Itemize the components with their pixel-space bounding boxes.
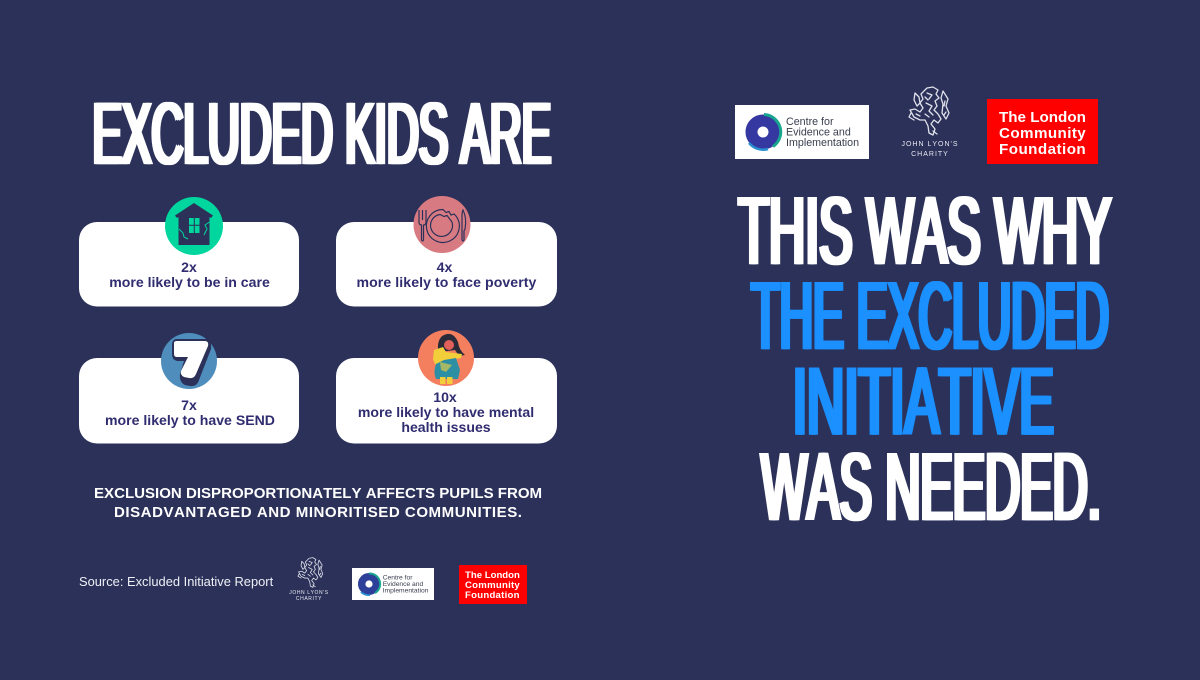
logo: Centre for Evidence small: Centre for [383,574,413,581]
headline: THIS WAS WHY [738,178,1111,285]
headline [738,178,1111,541]
icon: plate and cutlery [414,196,470,253]
stat text: 10x: 10x [433,389,457,405]
stat text: 10x [358,389,534,435]
headline: INITIATIVE [793,349,1054,455]
logo: London Community Foundation large: The London [999,109,1086,126]
logo: John Lyon's Charity small: CHARITY [296,596,322,602]
logo: London Community Foundation small: Foundation [465,590,520,601]
stat text: 2x [109,259,270,290]
logo: Centre for Evidence large: Centre for [786,116,834,128]
statement text [94,485,542,521]
logo: John Lyon's Charity small [289,558,329,602]
stat text: 10x: health issues [401,419,491,435]
stat text: 4x: more likely to face poverty [357,274,537,290]
panel: mental health [336,330,557,444]
stat text: 2x: 2x [181,259,197,275]
stat text: 4x: 4x [437,259,452,275]
icon: number seven [161,333,217,389]
logo: John Lyon's Charity small: JOHN LYON'S [289,590,329,596]
stat text: 2x: more likely to be in care [109,274,270,290]
logo: Centre for Evidence large: Implementation [786,137,859,149]
panel: in care [79,197,299,306]
panel: poverty [336,196,557,306]
logo: Centre for Evidence small: Evidence and [383,581,424,588]
logo: John Lyon's Charity large: CHARITY [911,151,949,158]
logo: Centre for Evidence large [735,105,869,159]
title: EXCLUDED KIDS ARE [93,85,551,182]
logo: John Lyon's Charity large [901,87,959,158]
headline: THE EXCLUDED [751,262,1109,369]
stat text: 7x [105,397,275,428]
logo: London Community Foundation large [987,99,1098,164]
stat text: 4x [357,259,537,290]
logo: Centre for Evidence small: Implementation [383,588,429,594]
icon: sad girl illustration [418,330,474,386]
stat text: 7x: more likely to have SEND [105,412,275,428]
logo: Centre for Evidence small [352,568,434,600]
statement text: DISADVANTAGED AND MINORITISED COMMUNITIES. [114,504,522,521]
logo: London Community Foundation small: The London [465,570,520,581]
source text: Source: Excluded Initiative Report [79,574,274,589]
logo: John Lyon's Charity large: JOHN LYON'S [901,141,959,148]
stat text: 7x: 7x [181,397,197,413]
logo: Centre for Evidence large: Evidence and [786,126,851,138]
headline: WAS NEEDED. [761,435,1101,541]
stat text: 10x: more likely to have mental [358,404,534,420]
panel: SEND [79,333,299,444]
logo: London Community Foundation large: Community [999,125,1086,142]
logo: London Community Foundation small: Community [465,580,520,591]
logo: London Community Foundation small [459,565,527,604]
icon: cracked house [165,197,223,255]
logo: London Community Foundation large: Foundation [999,141,1086,158]
statement text: EXCLUSION DISPROPORTIONATELY AFFECTS PUPILS FROM [94,485,542,502]
